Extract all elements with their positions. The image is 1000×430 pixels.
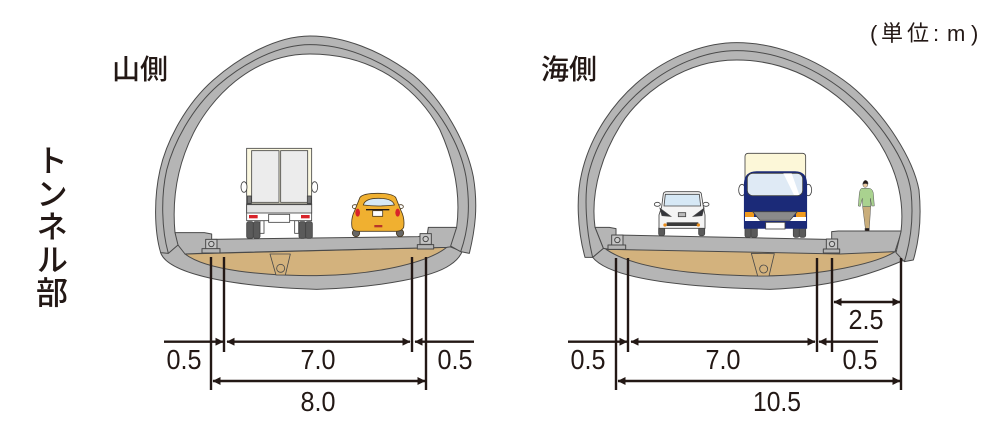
arch lining [156,36,476,253]
dimension labels: sea side: 7.0 [706,344,740,375]
sand fill [606,249,895,276]
arch lining [578,43,920,262]
road slab and ledges [595,227,902,254]
yellow car rear view [352,193,404,237]
heading: mountain side: 山側 [112,54,168,85]
blue truck front view [739,153,812,237]
sand fill [185,247,447,276]
dimension labels: mountain side: 8.0 [300,386,336,417]
central drain [751,253,774,276]
dimension labels: sea side: 0.5 [842,344,878,375]
inner lining line [163,45,468,253]
dimension labels: mountain side [166,344,472,417]
dimension lines: mountain side [164,257,474,390]
dimension lines: sea side [568,258,901,390]
section label: tunnel section: トンネル部 [32,144,68,309]
unit note: (単位:m) [870,21,978,46]
invert base [593,248,904,289]
inner lining line [586,51,912,262]
left drain gutter [608,235,626,249]
dimension labels: sea side [570,304,884,417]
dimension labels: sea side: 2.5 [848,304,884,335]
road slab and ledges [175,227,457,254]
left drain gutter [202,239,220,253]
pedestrian [858,180,874,231]
right drain gutter [417,234,434,249]
dimension labels: mountain side: 0.5 [438,344,472,375]
heading: sea side: 海側 [541,54,597,85]
dimension labels: sea side: 0.5 [570,344,606,375]
truck rear view [241,148,318,238]
right drain gutter [823,239,840,253]
central drain [270,254,290,275]
invert base [161,245,462,289]
dimension labels: sea side: 10.5 [753,386,801,417]
dimension labels: mountain side: 0.5 [166,344,202,375]
panel: mountain side tunnel cross-section [156,36,476,289]
white car front view [654,192,709,236]
dimension labels: mountain side: 7.0 [300,344,336,375]
panel: sea side tunnel cross-section [578,43,920,289]
